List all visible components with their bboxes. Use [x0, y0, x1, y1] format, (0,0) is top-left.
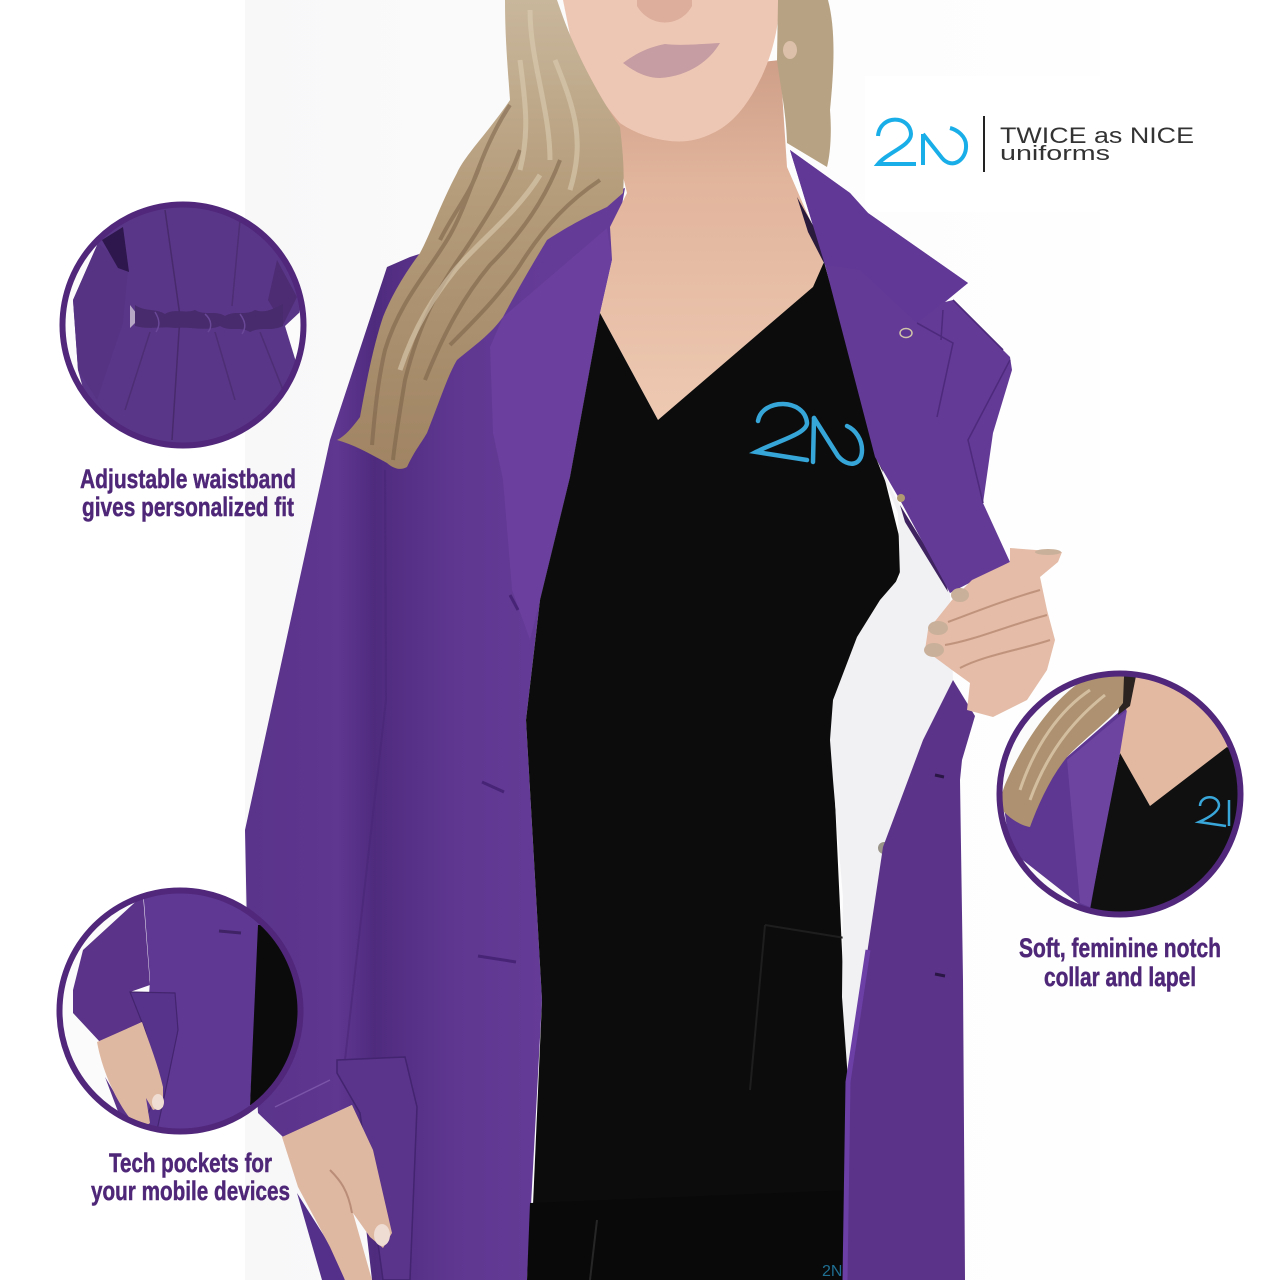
knuckle lines — [945, 590, 1050, 668]
face — [563, 0, 780, 142]
waistband logo: 2N — [822, 1263, 842, 1280]
detail photo: waistband — [73, 208, 300, 442]
hair light strands — [400, 10, 577, 370]
black top — [1090, 747, 1238, 912]
button hole — [219, 931, 241, 933]
hair dark strands — [372, 105, 600, 460]
dark hair shadow — [1118, 676, 1136, 715]
lips — [623, 43, 720, 78]
fingernail — [152, 1094, 164, 1110]
caption line 1: Tech pockets for — [109, 1148, 272, 1178]
nose shadow — [637, 0, 692, 22]
fingernails — [924, 549, 1061, 657]
earring — [783, 41, 797, 59]
icon: 2N mark — [878, 120, 966, 165]
caption line 1: Soft, feminine notch — [1019, 933, 1221, 963]
detail photo: collar — [1002, 676, 1238, 912]
brand subtitle: uniforms — [1000, 143, 1110, 165]
hair highlight — [1020, 690, 1105, 800]
hair left — [337, 0, 624, 469]
photo backdrop — [245, 0, 1100, 1280]
neck and chest — [600, 60, 823, 420]
caption — [80, 464, 296, 522]
pocket flap — [130, 992, 178, 1130]
waist gap — [130, 305, 135, 328]
ring — [1000, 674, 1240, 914]
collar shadow sliver — [797, 197, 825, 265]
black pants — [527, 1190, 850, 1280]
top pocket outline — [750, 925, 845, 1090]
arm gap — [102, 227, 129, 272]
hair — [1001, 676, 1124, 827]
hem stitching — [845, 950, 868, 1280]
caption line 1: Adjustable waistband — [80, 464, 296, 494]
coat back and sleeve — [73, 205, 300, 450]
jacket hem behind hand — [297, 1193, 345, 1280]
pants inseam — [590, 1220, 597, 1280]
ring — [62, 204, 304, 446]
caption — [1019, 933, 1221, 992]
collar snap — [900, 328, 912, 338]
upper collar — [790, 150, 968, 323]
ring — [60, 890, 300, 1132]
caption — [91, 1148, 290, 1206]
coat panel — [144, 894, 260, 1128]
black top — [250, 925, 298, 1106]
skin — [1120, 678, 1228, 806]
logo panel — [865, 76, 1194, 212]
hand — [97, 1022, 163, 1130]
left lapel — [490, 228, 612, 640]
lapel — [1067, 710, 1127, 907]
gathered waistband — [135, 304, 283, 332]
caption line 2: collar and lapel — [1044, 962, 1196, 992]
notch lapel seams — [917, 300, 1010, 503]
sleeve — [73, 895, 150, 1042]
logo divider — [983, 116, 985, 172]
right hand — [925, 548, 1062, 717]
inner snap upper — [897, 494, 905, 502]
left coat — [1003, 705, 1127, 910]
cuff stitching — [275, 1080, 330, 1107]
right arm edge — [268, 260, 297, 325]
sleeve shade — [73, 244, 98, 370]
right white gap — [285, 312, 300, 360]
center seam — [165, 210, 180, 440]
caption line 2: gives personalized fit — [82, 492, 294, 522]
inner snap lower — [878, 842, 890, 854]
right lower jacket panel — [843, 680, 975, 1280]
embroidered logo — [756, 404, 862, 464]
black top — [526, 262, 905, 1206]
gather highlights — [155, 312, 245, 334]
logo background — [865, 76, 1100, 212]
caption line 2: your mobile devices — [91, 1176, 290, 1206]
callout: tech pockets — [57, 888, 305, 1206]
white mesh lining — [830, 458, 953, 1080]
fingernail — [374, 1224, 390, 1246]
callout: notch collar — [997, 670, 1245, 992]
2N mark — [1199, 797, 1229, 826]
brand name: TWICE as NICE — [1000, 123, 1194, 148]
arm fold shadow — [345, 470, 386, 1060]
left jacket sleeve and body — [245, 188, 625, 1280]
right collar, lapel and shoulder — [790, 150, 1012, 593]
jacket hem — [105, 1077, 129, 1117]
callout: adjustable waistband — [59, 202, 307, 522]
hair right — [777, 0, 834, 167]
left hand — [282, 1105, 392, 1280]
lining shadow — [900, 505, 948, 592]
thumb crease — [330, 1170, 352, 1213]
button holes — [478, 595, 518, 962]
skirt folds — [125, 220, 285, 410]
detail photo: pocket — [73, 894, 298, 1128]
right button holes — [935, 775, 945, 976]
left pocket — [337, 1057, 417, 1280]
model photo illustration — [245, 0, 1062, 1280]
